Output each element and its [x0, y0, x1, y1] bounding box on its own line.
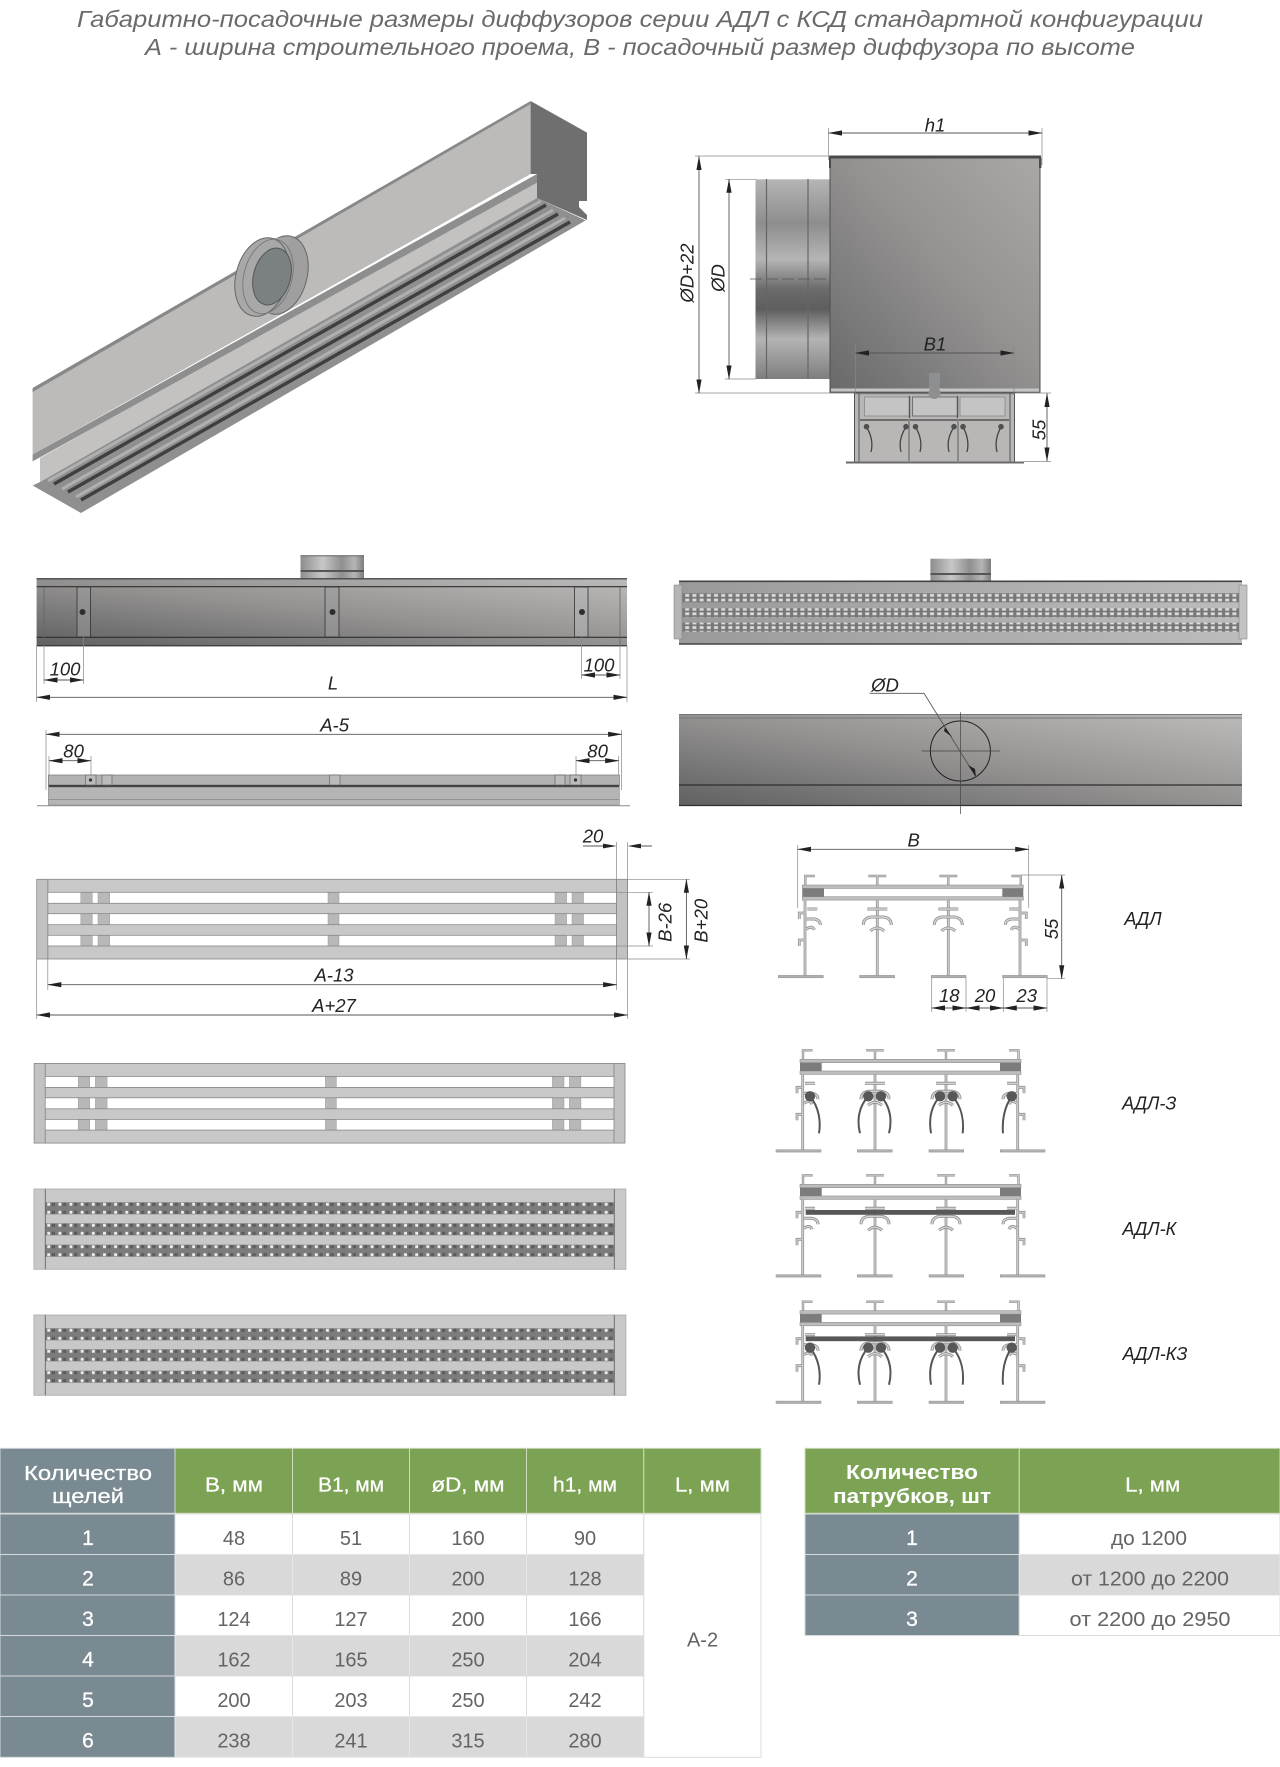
table row 4: 250 [451, 1650, 485, 1672]
profile section: АДЛ-З [776, 1050, 1045, 1152]
title [77, 6, 1203, 60]
table row 1: 90 [574, 1528, 596, 1550]
rear elevation dimensions [37, 637, 627, 702]
table row 2: от 1200 до 2200 [1071, 1568, 1229, 1590]
table row 6 [0, 1716, 644, 1757]
label: АДЛ-З: АДЛ-З [1121, 1093, 1176, 1113]
bottom strip view with dimensions: 80 [587, 740, 609, 762]
table row 4: 4 [82, 1648, 94, 1672]
table row 2 [805, 1554, 1280, 1595]
table: dimensions by number of slots [0, 1448, 761, 1757]
table row 4: 204 [568, 1650, 602, 1672]
table row 1: 160 [451, 1528, 485, 1550]
table header row: L, мм [1125, 1475, 1180, 1497]
title: А - ширина строительного проема, В - посадочный размер диффузора по высоте [143, 34, 1135, 60]
grille view 1 with dimensions [37, 826, 711, 1019]
icon: round duct collar [227, 230, 316, 322]
profile section: АДЛ with dimensions: B [908, 830, 920, 850]
merged L cell [644, 1514, 761, 1757]
table row 3: 166 [568, 1609, 602, 1631]
profile section: АДЛ with dimensions: 18 [939, 985, 960, 1006]
rear elevation dimensions: L [328, 672, 338, 694]
dimensions of side view: ØD [708, 264, 728, 293]
table row 1: 1 [906, 1527, 918, 1550]
profile section: АДЛ with dimensions: 20 [974, 985, 996, 1006]
table row 2: 128 [568, 1568, 602, 1590]
table row 1: до 1200 [1111, 1528, 1187, 1550]
grille view 1 with dimensions: B+20 [690, 898, 712, 943]
side section view with duct [676, 114, 1051, 464]
table header row: øD, мм [432, 1475, 504, 1497]
merged L cell: A-2 [687, 1630, 718, 1652]
duct collar [750, 179, 834, 379]
rear elevation dimensions: 100 [50, 658, 81, 680]
table row 3: от 2200 до 2950 [1070, 1609, 1230, 1631]
table row 5 [0, 1676, 644, 1716]
bottom strip view with dimensions: 80 [63, 740, 85, 762]
table: L by number of duct connections [805, 1448, 1280, 1636]
table row 1: 51 [340, 1528, 362, 1550]
table row 1 [0, 1514, 644, 1554]
table row 4: 162 [217, 1650, 251, 1672]
top plate view with duct opening [679, 674, 1242, 814]
table row 5: 242 [568, 1690, 602, 1712]
table row 3: 124 [217, 1609, 251, 1631]
table row 2: 89 [340, 1568, 362, 1590]
table row 1: 48 [223, 1528, 245, 1550]
table row 3 [0, 1595, 644, 1636]
profile section: АДЛ-КЗ [776, 1302, 1045, 1404]
grille view 3, perforated [34, 1189, 626, 1269]
table row 4: 165 [334, 1650, 368, 1672]
nozzle [300, 555, 364, 578]
title: Габаритно-посадочные размеры диффузоров серии АДЛ с КСД стандартной конфигурации [77, 6, 1203, 32]
grille view 1 with dimensions: 20 [582, 826, 604, 846]
table row 6: 241 [334, 1730, 368, 1752]
dimensions of side view: ØD+22 [676, 243, 698, 304]
brackets [77, 587, 588, 637]
nozzle [930, 559, 991, 581]
profile section: АДЛ with dimensions [778, 830, 1065, 1012]
table header row [805, 1448, 1280, 1513]
table row 2: 86 [223, 1568, 245, 1590]
table row 5: 5 [82, 1689, 94, 1712]
table row 3: 3 [906, 1608, 918, 1631]
grille view 1 with dimensions: A+27 [311, 995, 357, 1016]
table row 4 [0, 1636, 644, 1676]
table row 2: 2 [906, 1568, 918, 1590]
dimensions of side view: B1 [924, 334, 946, 354]
table row 3: 3 [82, 1608, 94, 1631]
table row 6: 315 [451, 1730, 485, 1752]
profile section: АДЛ with dimensions: 55 [1041, 918, 1062, 939]
table row 6: 280 [568, 1730, 602, 1752]
profile section: АДЛ with dimensions: 23 [1015, 985, 1038, 1006]
table row 6: 6 [82, 1730, 94, 1752]
table row 3 [805, 1595, 1280, 1636]
duct opening circle [930, 721, 990, 781]
table header row: h1, мм [553, 1475, 617, 1497]
table header row: B, мм [205, 1475, 263, 1497]
dimensions of side view: h1 [925, 114, 945, 136]
table header row [0, 1448, 761, 1513]
profile under box [846, 387, 1024, 464]
table header row: Количество [24, 1463, 152, 1485]
plenum box [829, 156, 1041, 393]
table row 3: 200 [451, 1609, 485, 1631]
table row 5: 203 [334, 1690, 368, 1712]
table row 2: 200 [451, 1568, 485, 1590]
bottom strip view with dimensions: A-5 [319, 714, 350, 736]
grille view 1 with dimensions: B-26 [654, 902, 676, 942]
3D view of diffuser [33, 101, 587, 513]
table header row: щелей [52, 1486, 124, 1508]
table row 1 [805, 1514, 1280, 1554]
dimensions of side view [676, 114, 1051, 462]
table row 6: 238 [217, 1730, 251, 1752]
label: АДЛ: АДЛ [1123, 909, 1162, 929]
grille view 1 with dimensions: A-13 [313, 964, 354, 986]
bottom strip view with dimensions [37, 714, 630, 806]
table row 3: 127 [334, 1609, 368, 1631]
label: АДЛ-К: АДЛ-К [1121, 1219, 1178, 1239]
table header row: патрубков, шт [833, 1486, 991, 1508]
dimensions of side view: 55 [1028, 419, 1050, 440]
table header row: B1, мм [318, 1475, 384, 1497]
top plate view with duct opening: ØD [870, 674, 899, 696]
table header row: L, мм [675, 1475, 730, 1497]
table row 2 [0, 1554, 644, 1595]
table header row: Количество [846, 1462, 978, 1484]
rear elevation view [37, 555, 627, 646]
table row 5: 200 [217, 1690, 251, 1712]
table row 1: 1 [82, 1527, 94, 1550]
table row 2: 2 [82, 1568, 94, 1590]
label: АДЛ-КЗ: АДЛ-КЗ [1122, 1344, 1187, 1364]
rear elevation dimensions: 100 [584, 654, 615, 676]
profile section: АДЛ-К [776, 1175, 1045, 1277]
grille view 2 [34, 1063, 625, 1143]
table row 5: 250 [451, 1690, 485, 1712]
front elevation view with perforated slots [674, 559, 1247, 644]
grille view 4, perforated [34, 1315, 626, 1395]
